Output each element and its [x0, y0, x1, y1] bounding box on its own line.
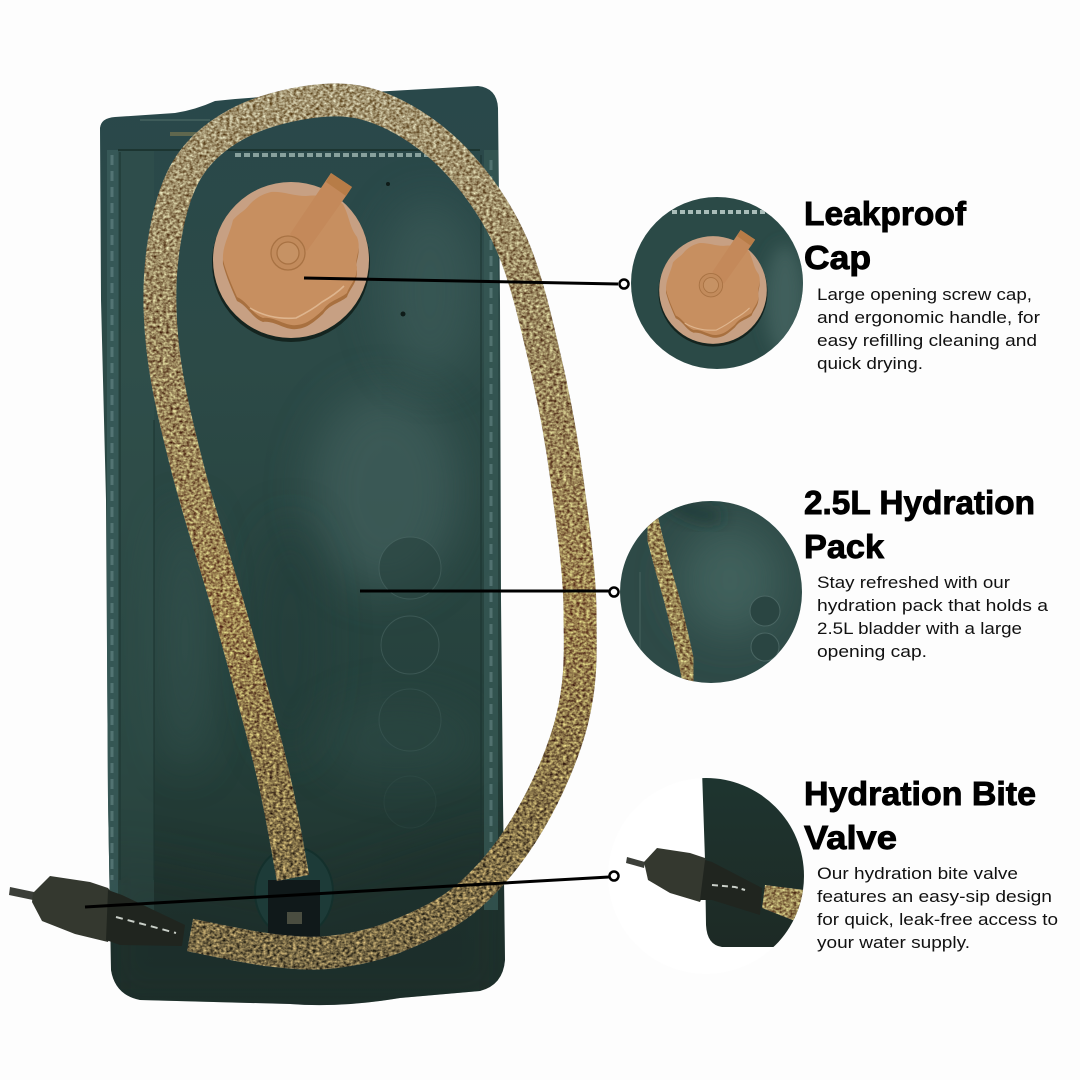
- text: cap description: quick drying.: [817, 354, 923, 373]
- heading: hydration bite valve: [804, 775, 1036, 856]
- bladder body: [100, 86, 510, 1010]
- detail circle: valve close-up: [626, 778, 804, 947]
- text: pack description: 2.5L bladder with a large: [817, 619, 1022, 638]
- text: valve description: your water supply.: [817, 933, 970, 952]
- text: pack description: hydration pack that holds a: [817, 596, 1049, 615]
- leader line: pack: [360, 588, 618, 596]
- text: valve description: for quick, leak-free access to: [817, 910, 1058, 929]
- screw cap: [212, 173, 370, 342]
- text: cap description: and ergonomic handle, for: [817, 308, 1040, 327]
- embossed markings: [379, 537, 441, 828]
- drinking tube with mesh sleeve: [160, 100, 580, 953]
- callout: bite valve: [84, 778, 1058, 952]
- text: valve description: features an easy-sip design: [817, 887, 1052, 906]
- text: valve description: [817, 864, 1058, 952]
- text: cap description: easy refilling cleaning and: [817, 331, 1037, 350]
- text: cap description: [817, 285, 1040, 373]
- text: cap description: Large opening screw cap,: [817, 285, 1032, 304]
- product photo: hydration bladder: [9, 86, 580, 1010]
- text: pack description: Stay refreshed with our: [817, 573, 1010, 592]
- heading: 2.5L hydration pack: [804, 484, 1035, 565]
- heading: 2.5L hydration pack: 2.5L Hydration: [804, 484, 1035, 521]
- text: pack description: [817, 573, 1049, 661]
- leader line: cap: [304, 278, 628, 288]
- bite valve: [9, 876, 185, 946]
- detail circle: cap close-up: [631, 197, 803, 369]
- callout: leakproof cap: [304, 190, 1040, 380]
- detail circle: bladder close-up: [620, 501, 802, 683]
- heading: leakproof cap: Leakproof: [804, 195, 967, 232]
- text: pack description: opening cap.: [817, 642, 927, 661]
- text: valve description: Our hydration bite valve: [817, 864, 1018, 883]
- heading: hydration bite valve: Hydration Bite: [804, 775, 1036, 812]
- heading: 2.5L hydration pack: Pack: [804, 528, 885, 565]
- heading: hydration bite valve: Valve: [804, 819, 897, 856]
- tube exit port: [255, 847, 333, 937]
- leader line: valve: [85, 872, 618, 907]
- rivet marks: [386, 182, 406, 316]
- heading: leakproof cap: Cap: [804, 239, 871, 276]
- callout: hydration pack: [360, 484, 1049, 690]
- heading: leakproof cap: [804, 195, 967, 276]
